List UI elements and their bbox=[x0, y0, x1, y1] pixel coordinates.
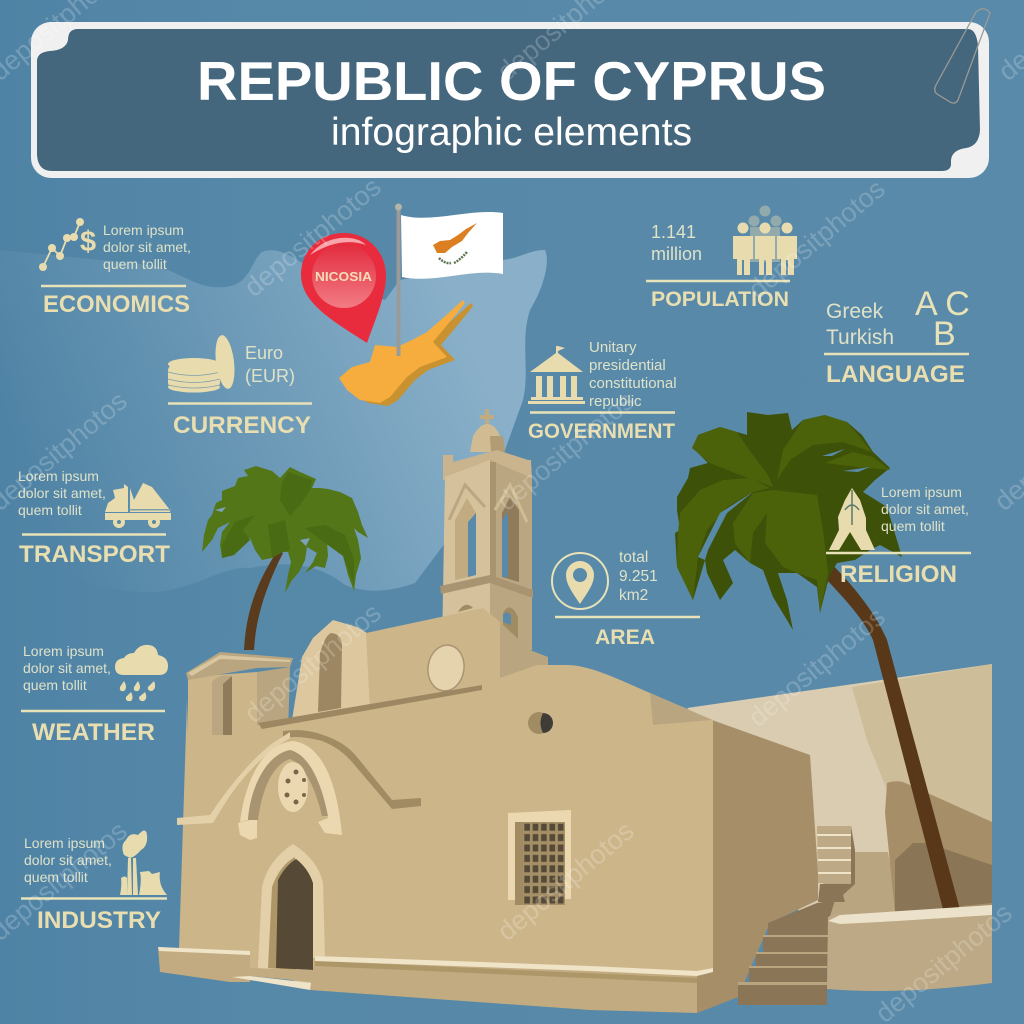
economics label: ECONOMICS bbox=[43, 291, 190, 318]
icon: government building bbox=[528, 346, 585, 404]
capital pin: Nicosia: NICOSIA bbox=[315, 269, 373, 284]
icon: growth chart with dollar bbox=[39, 218, 96, 271]
section: population bbox=[646, 206, 797, 311]
tower cross and dome bbox=[470, 409, 505, 452]
section: language bbox=[824, 285, 970, 388]
section: currency bbox=[168, 334, 312, 439]
church left tower bbox=[186, 652, 293, 760]
background cliff bbox=[687, 664, 992, 920]
church plinth bbox=[158, 947, 738, 1013]
paperclip bbox=[935, 9, 990, 103]
icon: growth chart with dollar: $ bbox=[80, 226, 96, 258]
transport text: Lorem ipsum bbox=[18, 468, 99, 484]
currency text: Euro bbox=[245, 343, 283, 363]
economics text: dolor sit amet, bbox=[103, 239, 191, 255]
alphabet letters: A C bbox=[915, 285, 970, 323]
stock watermarks: depositphotos bbox=[743, 174, 891, 305]
currency label: CURRENCY bbox=[173, 412, 311, 439]
religion text: dolor sit amet, bbox=[881, 501, 969, 517]
upper staircase bbox=[817, 826, 855, 902]
tower faces bbox=[442, 460, 490, 650]
title text: REPUBLIC OF CYPRUS bbox=[197, 50, 826, 112]
religion text: quem tollit bbox=[881, 518, 945, 534]
language text: Turkish bbox=[826, 326, 894, 349]
stock watermarks: depositphotos bbox=[239, 598, 387, 729]
area text: total bbox=[619, 549, 648, 566]
palm fronds bbox=[202, 466, 368, 593]
palm trunk bbox=[244, 550, 283, 650]
church right side wall bbox=[697, 720, 818, 1013]
population text: million bbox=[651, 244, 702, 264]
weather text: quem tollit bbox=[23, 677, 87, 693]
government label: GOVERNMENT bbox=[528, 420, 675, 443]
icon: coins bbox=[168, 334, 237, 392]
right palm tree trunk bbox=[790, 535, 962, 917]
section: economics bbox=[39, 218, 191, 318]
roof ledge bbox=[258, 685, 482, 729]
religion label: RELIGION bbox=[840, 561, 957, 588]
industry label: INDUSTRY bbox=[37, 907, 161, 934]
tower right window bbox=[495, 485, 527, 582]
rose window bbox=[278, 762, 308, 812]
industry text: quem tollit bbox=[24, 869, 88, 885]
church arch moulding bbox=[177, 730, 421, 840]
transport text: quem tollit bbox=[18, 502, 82, 518]
church ruined arch bbox=[292, 620, 372, 720]
icon: people bbox=[733, 206, 797, 275]
church barred window bbox=[508, 810, 571, 905]
icon: factory bbox=[120, 830, 167, 895]
currency text: (EUR) bbox=[245, 366, 295, 386]
area label: AREA bbox=[595, 626, 655, 649]
transport label: TRANSPORT bbox=[19, 541, 170, 568]
section: transport bbox=[18, 468, 171, 568]
left palm tree bbox=[202, 466, 368, 650]
round disk window bbox=[425, 643, 467, 693]
language label: LANGUAGE bbox=[826, 361, 965, 388]
government text: republic bbox=[589, 393, 642, 410]
language text: Greek bbox=[826, 300, 884, 323]
government text: presidential bbox=[589, 357, 666, 374]
section: area bbox=[552, 549, 700, 649]
church door bbox=[258, 844, 325, 970]
capital pin: Nicosia bbox=[301, 233, 386, 343]
map of the region bbox=[0, 250, 547, 592]
church upper wall bbox=[366, 608, 548, 710]
government text: constitutional bbox=[589, 375, 677, 392]
icon: location in rings bbox=[552, 553, 608, 609]
population text: 1.141 bbox=[651, 222, 696, 242]
tower parapet bbox=[443, 450, 532, 480]
lower staircase bbox=[738, 900, 835, 1005]
population label: POPULATION bbox=[651, 288, 789, 311]
area text: km2 bbox=[619, 587, 648, 604]
round vent window bbox=[528, 712, 550, 734]
weather label: WEATHER bbox=[32, 719, 155, 746]
tower lower arches bbox=[458, 605, 473, 612]
right palm tree fronds bbox=[675, 412, 902, 630]
left tower window bbox=[212, 676, 232, 738]
icon: rain cloud bbox=[115, 645, 168, 701]
title banner bbox=[31, 9, 990, 178]
terrace wall bbox=[827, 905, 992, 991]
section: government bbox=[528, 339, 677, 443]
industry text: Lorem ipsum bbox=[24, 835, 105, 851]
flag of Cyprus on pole bbox=[395, 204, 503, 356]
stock watermarks: depositphotos bbox=[239, 172, 387, 303]
tower left window bbox=[449, 485, 485, 580]
section: weather bbox=[21, 643, 168, 746]
icon: dump truck bbox=[105, 483, 171, 528]
area text: 9.251 bbox=[619, 568, 658, 585]
section: religion bbox=[826, 484, 971, 588]
alphabet letters: B bbox=[933, 315, 956, 353]
stock watermarks: depositphotos bbox=[492, 816, 640, 947]
economics text: Lorem ipsum bbox=[103, 222, 184, 238]
Cyprus island map bbox=[339, 300, 473, 406]
weather text: Lorem ipsum bbox=[23, 643, 104, 659]
weather text: dolor sit amet, bbox=[23, 660, 111, 676]
church bell tower bbox=[440, 409, 533, 650]
section: industry bbox=[21, 830, 167, 934]
government text: Unitary bbox=[589, 339, 637, 356]
church main front wall bbox=[179, 665, 713, 1005]
transport text: dolor sit amet, bbox=[18, 485, 106, 501]
rose window arch bbox=[240, 741, 342, 835]
economics text: quem tollit bbox=[103, 256, 167, 272]
icon: praying hands bbox=[829, 488, 875, 550]
subtitle text: infographic elements bbox=[331, 111, 692, 154]
tower cornice bbox=[440, 575, 533, 598]
industry text: dolor sit amet, bbox=[24, 852, 112, 868]
religion text: Lorem ipsum bbox=[881, 484, 962, 500]
stock watermarks: depositphotos bbox=[743, 602, 891, 733]
stock watermarks: depositphotos bbox=[492, 386, 640, 517]
